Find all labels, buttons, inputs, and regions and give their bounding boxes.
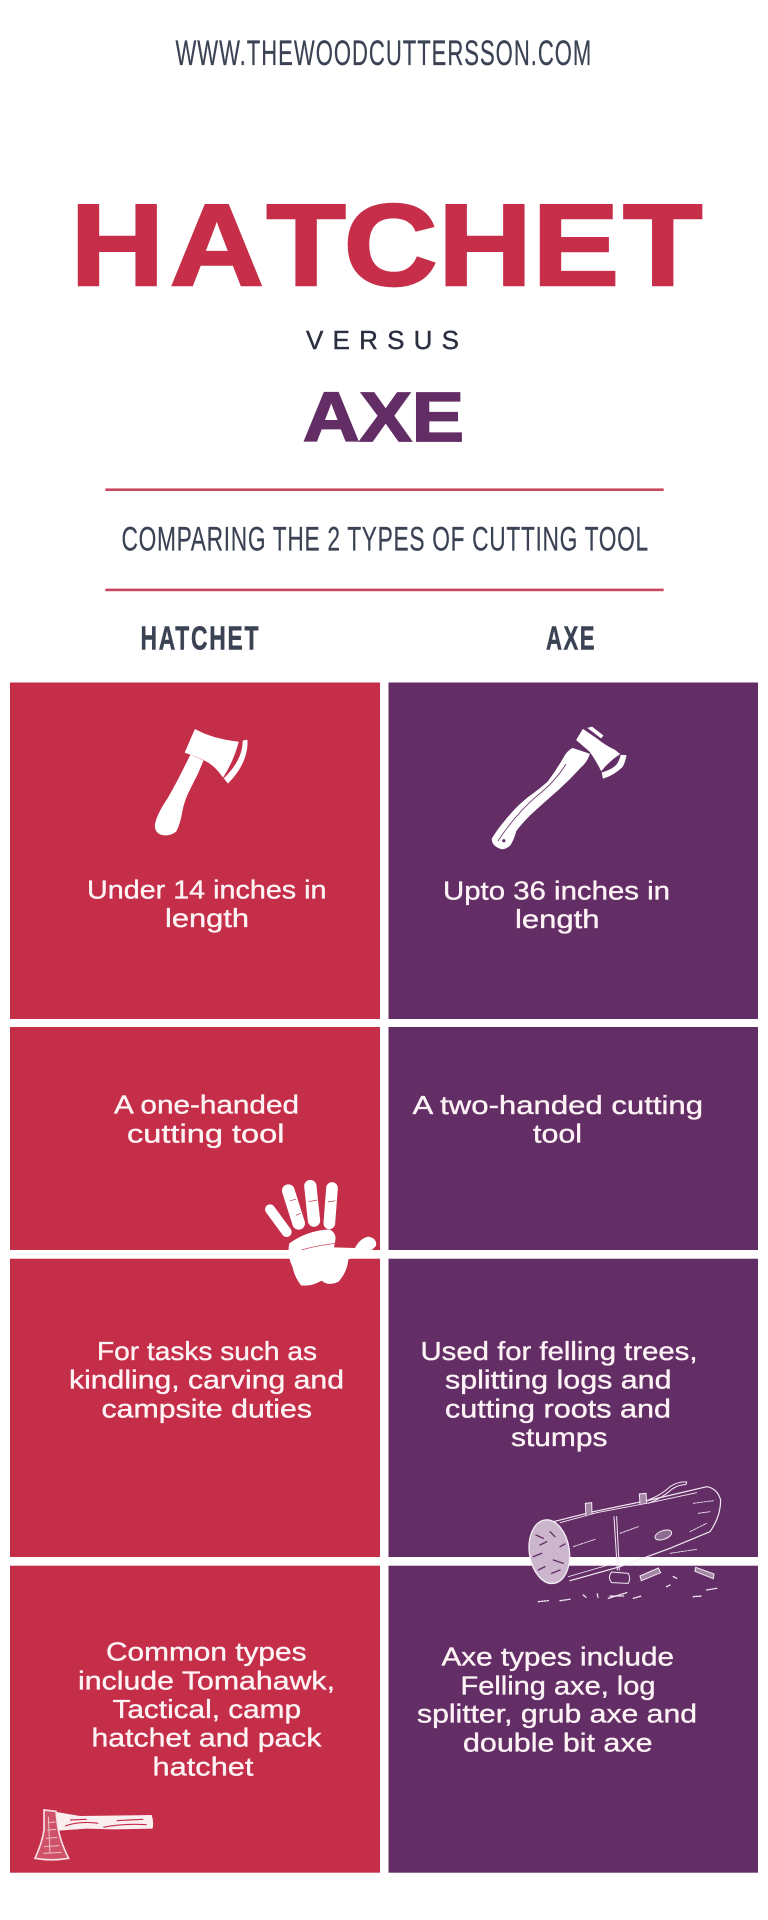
text: two-handed tool: tool — [533, 1121, 582, 1149]
text: hatchet types: Tactical, camp — [112, 1696, 301, 1724]
text: under 14 inches: length — [165, 905, 249, 933]
text: axe types: Axe types include — [442, 1644, 674, 1672]
text: axe tasks: cutting roots and — [445, 1395, 671, 1423]
text: hatchet types: hatchet — [152, 1754, 254, 1782]
text: two-handed tool: A two-handed cutting — [412, 1092, 703, 1120]
text: under 14 inches: Under 14 inches in — [87, 876, 326, 904]
title: axe: AXE — [303, 378, 464, 456]
panel: two-handed — [388, 1027, 758, 1250]
icon: sketched hatchet — [35, 1810, 153, 1860]
text: axe tasks: Used for felling trees, — [420, 1338, 698, 1366]
icon: axe — [492, 727, 626, 849]
icon: sketched log — [525, 1482, 721, 1602]
panel: hatchet length — [10, 682, 380, 1019]
text: hatchet tasks — [69, 1338, 344, 1423]
title: hatchet: HATCHET — [70, 181, 702, 310]
panel: hatchet tasks — [10, 1259, 380, 1557]
panel: axe types — [388, 1566, 758, 1873]
text: hatchet tasks: For tasks such as — [97, 1338, 317, 1366]
text: axe types: double bit axe — [463, 1730, 652, 1758]
text: axe types — [417, 1644, 697, 1758]
text: two-handed tool — [412, 1092, 703, 1149]
text: one-handed tool: A one-handed — [114, 1092, 299, 1120]
website url: WWW.THEWOODCUTTERSSON.COM — [176, 35, 591, 73]
text: upto 36 inches — [443, 877, 670, 934]
text: under 14 inches — [87, 876, 326, 933]
text: hatchet tasks: campsite duties — [102, 1395, 312, 1423]
text: hatchet types: include Tomahawk, — [78, 1667, 335, 1695]
column heading: hatchet: HATCHET — [140, 620, 259, 658]
panel: hatchet types — [10, 1566, 380, 1873]
text: hatchet tasks: kindling, carving and — [69, 1367, 344, 1395]
text: axe tasks: stumps — [511, 1424, 608, 1452]
text: axe tasks: splitting logs and — [445, 1366, 672, 1394]
text: upto 36 inches: length — [515, 906, 600, 934]
subtitle: versus: VERSUS — [306, 325, 459, 355]
text: axe tasks — [420, 1338, 698, 1452]
panel: axe length — [388, 682, 758, 1019]
text: one-handed tool — [114, 1092, 299, 1148]
tagline: COMPARING THE 2 TYPES OF CUTTING TOOL — [122, 521, 648, 559]
panel: one-handed — [10, 1027, 380, 1250]
text: axe types: splitter, grub axe and — [417, 1701, 697, 1729]
text: one-handed tool: cutting tool — [127, 1120, 284, 1148]
icon: hatchet — [155, 729, 247, 835]
panel: axe tasks — [388, 1259, 758, 1557]
icon: hand print — [270, 1186, 376, 1286]
text: upto 36 inches: Upto 36 inches in — [443, 877, 670, 905]
text: hatchet types: Common types — [106, 1639, 306, 1667]
text: hatchet types — [78, 1639, 335, 1782]
column heading: axe: AXE — [546, 620, 595, 658]
text: axe types: Felling axe, log — [460, 1672, 656, 1700]
text: hatchet types: hatchet and pack — [92, 1725, 322, 1753]
